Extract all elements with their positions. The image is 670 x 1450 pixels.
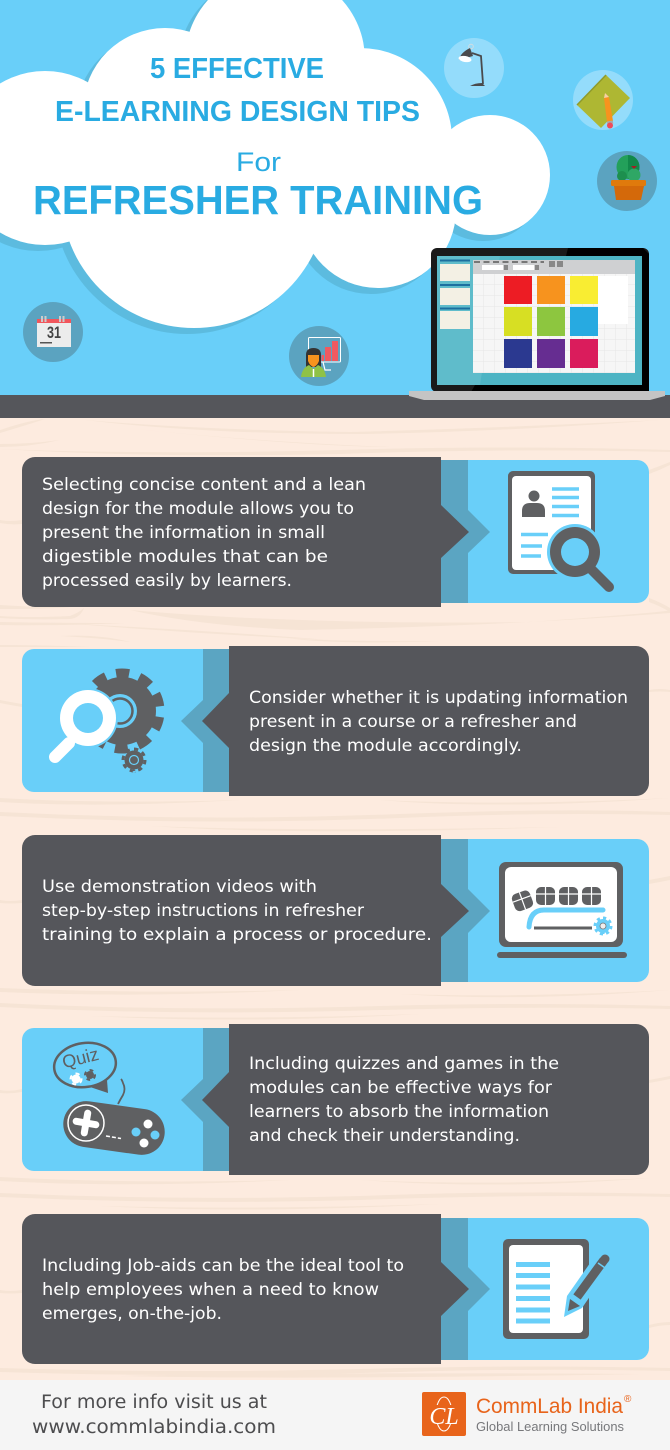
footer text: For more info visit us at xyxy=(41,1392,267,1413)
title: E-LEARNING DESIGN TIPS xyxy=(55,96,420,128)
logo xyxy=(422,1392,632,1436)
icon: profile document with magnifier xyxy=(508,471,609,587)
icon: desk lamp xyxy=(444,38,504,98)
cloud shadow xyxy=(0,0,543,334)
panel: tip 3 xyxy=(22,835,649,986)
tip 3 text: step-by-step instructions in refresher xyxy=(42,901,364,920)
logo: Global Learning Solutions xyxy=(476,1419,624,1434)
logo: ® xyxy=(624,1394,632,1405)
logo: CommLab India xyxy=(476,1395,623,1418)
icon: game controller xyxy=(60,1079,168,1158)
tip 4 text: learners to absorb the information xyxy=(249,1102,549,1121)
icon: notebook and pencil xyxy=(573,70,633,130)
panel: tip 4 xyxy=(22,1024,649,1175)
tip 2 text: Consider whether it is updating information xyxy=(249,688,628,707)
tip 4 text: and check their understanding. xyxy=(249,1126,520,1145)
icon: presenter with chart xyxy=(289,326,349,386)
tip 4 text: modules can be effective ways for xyxy=(249,1078,552,1097)
icon: gears with magnifier xyxy=(55,673,160,771)
tip 1 text xyxy=(42,475,366,590)
icon: calendar: 31 xyxy=(47,323,61,342)
header background xyxy=(0,0,670,395)
icon: quiz bubble: Quiz xyxy=(60,1044,101,1072)
logo: CL xyxy=(429,1404,459,1430)
tip 1 text: digestible modules that can be xyxy=(42,547,328,566)
cloud xyxy=(0,0,550,328)
tip 1 text: design for the module allows you to xyxy=(42,499,354,518)
tip 4 text: Including quizzes and games in the xyxy=(249,1054,559,1073)
icon: job aid document and pencil xyxy=(503,1239,610,1339)
footer text: www.commlabindia.com xyxy=(32,1417,276,1438)
footer xyxy=(0,1380,670,1450)
tip 2 text xyxy=(249,688,628,755)
panel: tip 1 xyxy=(22,457,649,607)
tip 3 text: training to explain a process or procedure. xyxy=(42,925,432,944)
panel: tip 5 xyxy=(22,1214,649,1364)
icon: laptop xyxy=(431,248,649,392)
icon: calendar xyxy=(23,302,83,362)
tip 4 text xyxy=(249,1054,559,1145)
header desk band xyxy=(0,395,670,418)
title: REFRESHER TRAINING xyxy=(33,177,483,223)
title: 5 EFFECTIVE xyxy=(150,53,324,85)
tip 5 text xyxy=(42,1256,404,1323)
tip 5 text: Including Job-aids can be the ideal tool to xyxy=(42,1256,404,1275)
panel: tip 2 xyxy=(22,646,649,796)
icon: video process on laptop xyxy=(497,862,627,958)
laptop base on desk xyxy=(409,391,665,400)
icon: quiz bubble xyxy=(51,1039,119,1093)
tip 2 text: design the module accordingly. xyxy=(249,736,522,755)
tip 1 text: processed easily by learners. xyxy=(42,571,292,590)
tip 1 text: Selecting concise content and a lean xyxy=(42,475,366,494)
tip 1 text: present the information in small xyxy=(42,523,325,542)
tip 3 text: Use demonstration videos with xyxy=(42,877,317,896)
tip 5 text: help employees when a need to know xyxy=(42,1280,379,1299)
title xyxy=(33,53,483,223)
title: For xyxy=(236,147,281,177)
footer text xyxy=(32,1392,276,1438)
tip 2 text: present in a course or a refresher and xyxy=(249,712,577,731)
tip 5 text: emerges, on-the-job. xyxy=(42,1304,222,1323)
icon: cactus xyxy=(597,151,657,211)
tip 3 text xyxy=(42,877,432,944)
